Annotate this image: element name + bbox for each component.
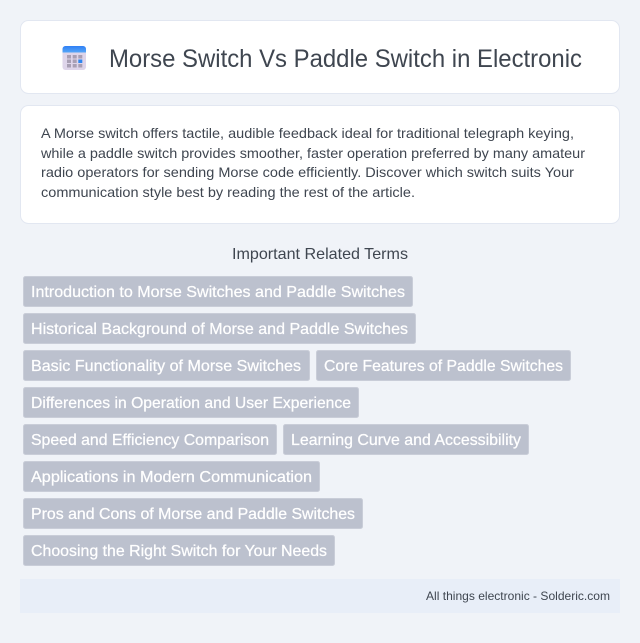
tag: speed (24, 424, 276, 454)
tag: choosing: Choosing the Right Switch for Your Needs (31, 543, 327, 560)
tag: introduction (24, 276, 412, 306)
description text: while a paddle switch provides smoother, faster operation preferred by many amateur (40, 145, 585, 161)
description text: communication style best by reading the rest of the article. (41, 184, 415, 200)
description text (40, 125, 585, 200)
tag: introduction: Introduction to Morse Switches and Paddle Switches (31, 284, 405, 301)
tag: differences: Differences in Operation and User Experience (31, 395, 351, 412)
tag: core features (316, 350, 570, 380)
tag: choosing (24, 536, 334, 566)
footer text: All things electronic - Solderic.com (426, 589, 610, 603)
tag: pros and cons (24, 498, 362, 528)
tag: history: Historical Background of Morse and Paddle Switches (31, 321, 408, 338)
tag: applications (24, 462, 320, 492)
icon: calendar (62, 46, 86, 70)
tag: core features: Core Features of Paddle Switches (324, 358, 563, 375)
panel: description (20, 106, 620, 224)
tag: learning curve: Learning Curve and Accessibility (291, 432, 521, 449)
tag: learning curve (284, 424, 528, 454)
tag: applications: Applications in Modern Communication (31, 469, 312, 486)
term tags (24, 276, 570, 566)
tag: differences (24, 388, 358, 418)
description text: radio operators for sending Morse code efficiently. Discover which switch suits Your (41, 164, 574, 180)
tag: functionality: Basic Functionality of Morse Switches (31, 358, 301, 375)
footer (20, 579, 620, 613)
heading: important related terms: Important Related Terms (232, 246, 408, 263)
tag: history (24, 314, 416, 344)
tag: functionality (24, 350, 310, 380)
description text: A Morse switch offers tactile, audible feedback ideal for traditional telegraph keying, (41, 125, 574, 141)
tag: speed: Speed and Efficiency Comparison (31, 432, 269, 449)
tag: pros and cons: Pros and Cons of Morse and Paddle Switches (31, 506, 355, 523)
title: Morse Switch Vs Paddle Switch in Electronic (109, 45, 582, 73)
panel: title card (20, 20, 620, 94)
